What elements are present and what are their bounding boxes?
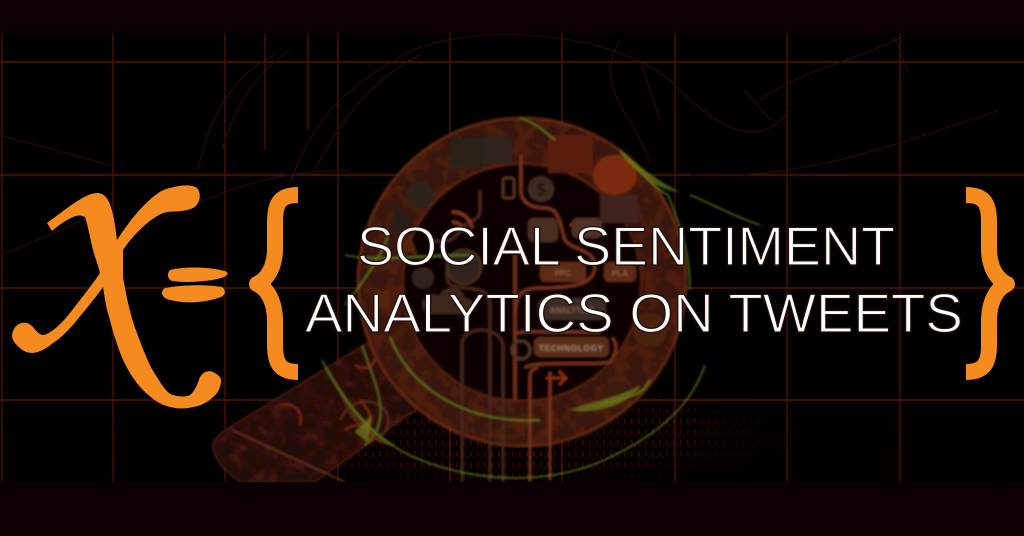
label: PLA tag: PLA: [612, 269, 628, 278]
right brace: [966, 195, 1007, 372]
red data rain under the magnifier: [8, 387, 1018, 482]
left brace: [257, 195, 298, 372]
title: [305, 215, 963, 344]
magnifier ring: [357, 117, 687, 447]
title line 2: ANALYTICS ON TWEETS: [305, 282, 963, 344]
green light arcs: [322, 118, 760, 478]
icon: dollar coin: [528, 176, 554, 202]
icon: cloud: [422, 288, 474, 314]
formula: x =: [12, 185, 228, 408]
label: technology tag: TECHNOLOGY: [539, 344, 604, 353]
label: PPC tag: PPC: [555, 269, 571, 278]
icon: magnifying glass: [213, 117, 760, 482]
label: PLA tag: [604, 262, 636, 282]
magnifier lens: [405, 165, 639, 399]
icon: arrow right: [546, 371, 566, 385]
icon: percent circle: [412, 267, 434, 289]
lens circuit traces: [515, 155, 616, 482]
lens icons: [412, 176, 636, 385]
magnifier handle: [213, 343, 420, 482]
label: PPC tag: [540, 262, 586, 282]
letter X: [12, 185, 221, 408]
icon: plus circle: [512, 341, 530, 359]
title line 1: SOCIAL SENTIMENT: [357, 215, 895, 277]
label: analytics tag: ANALYTICS: [549, 306, 595, 315]
ring mottled texture: [357, 117, 687, 447]
icon: dollar coin: $: [536, 180, 546, 199]
label: technology tag: [534, 337, 609, 357]
equals sign: [162, 267, 228, 302]
icon: wifi: [452, 212, 472, 232]
label: analytics tag: [538, 298, 606, 320]
icon: phone: [503, 178, 514, 198]
label: top tag: [528, 218, 558, 242]
ring icons: [375, 135, 667, 409]
